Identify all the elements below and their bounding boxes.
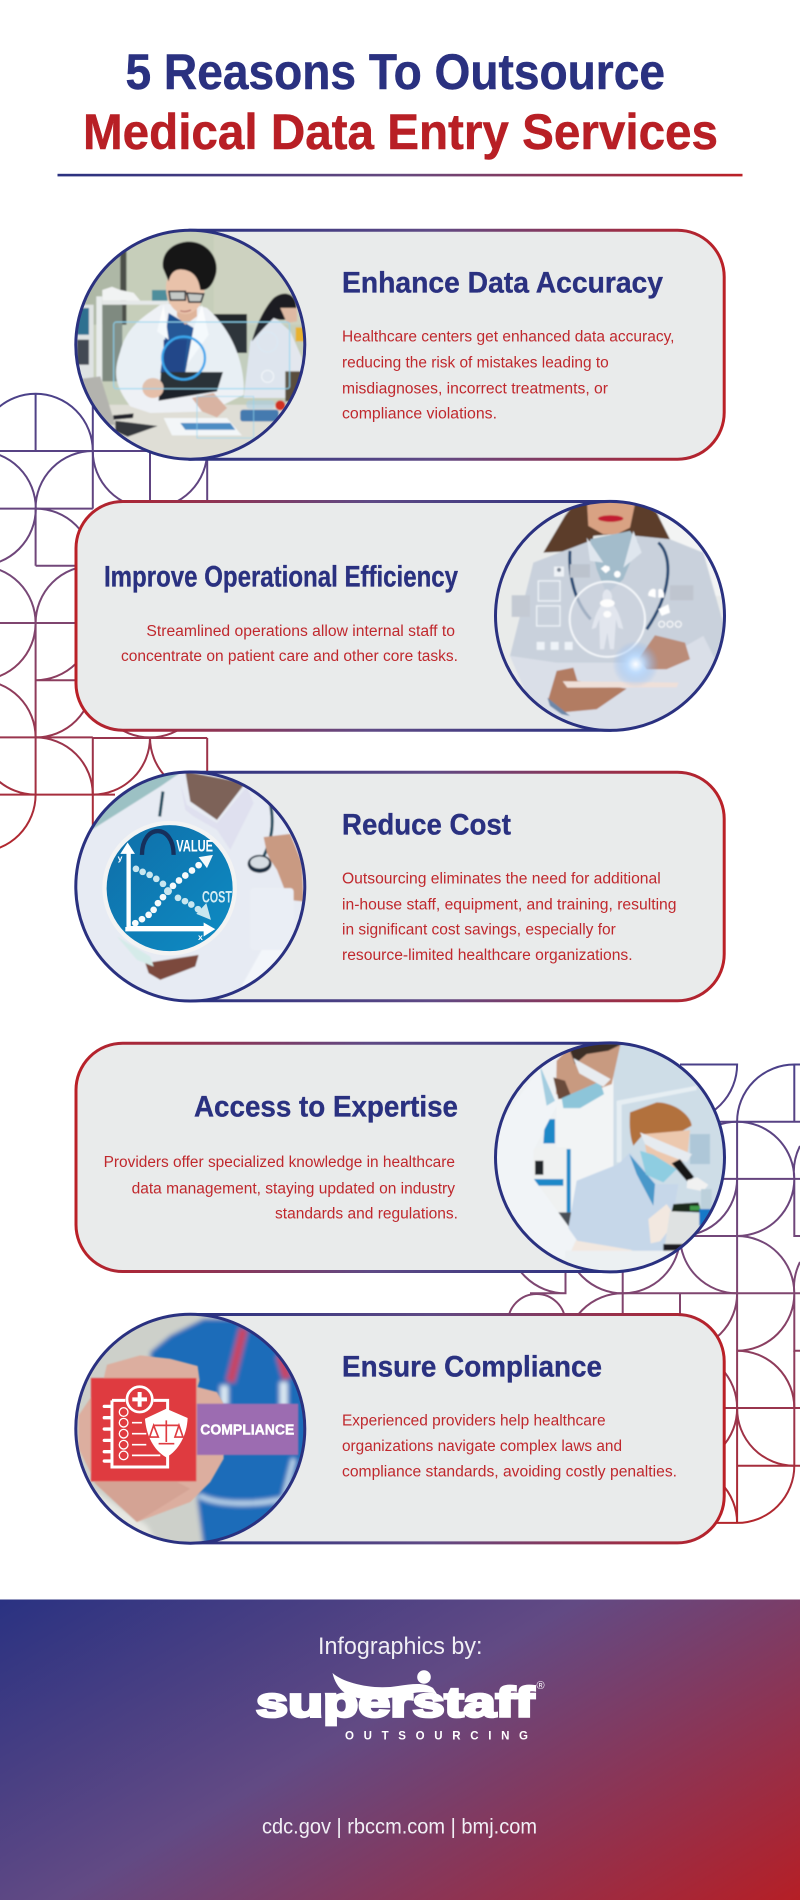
text block: resource-limited healthcare organizations.	[342, 947, 633, 964]
logo: superstaff outsourcing: ®	[536, 1680, 545, 1692]
text block: data management, staying updated on industry	[132, 1180, 455, 1197]
text block: in-house staff, equipment, and training, resulting	[342, 896, 676, 913]
text block: standards and regulations.	[275, 1205, 458, 1222]
logo: superstaff outsourcing	[256, 1670, 545, 1742]
photo: doctor with value and cost chart	[70, 766, 310, 1006]
title: Medical Data Entry Services	[83, 104, 718, 160]
title: 5 Reasons To Outsource	[126, 44, 665, 100]
photo: doctor with value and cost chart: y	[118, 853, 123, 863]
text block: compliance violations.	[342, 405, 497, 422]
photo: lab researchers with microscope	[490, 1037, 730, 1277]
panel: access to expertise	[76, 1043, 610, 1272]
heading: Access to Expertise	[194, 1091, 458, 1124]
sources: cdc.gov | rbccm.com | bmj.com	[262, 1816, 537, 1839]
logo: superstaff outsourcing: superstaff	[256, 1679, 535, 1726]
panel: reduce cost	[190, 772, 724, 1001]
text block: organizations navigate complex laws and	[342, 1438, 622, 1455]
text block: misdiagnoses, incorrect treatments, or	[342, 380, 608, 397]
photo: doctor with value and cost chart: COST	[202, 887, 232, 906]
logo: superstaff outsourcing: OUTSOURCING	[345, 1730, 528, 1742]
photo: doctor with value and cost chart: x	[198, 932, 203, 942]
text block: reducing the risk of mistakes leading to	[342, 355, 609, 372]
panel: improve operational efficiency	[76, 502, 610, 730]
title	[83, 44, 718, 160]
text block: concentrate on patient care and other core tasks.	[121, 648, 458, 665]
photo: doctor with value and cost chart: VALUE	[176, 836, 213, 855]
panel: enhance data accuracy	[190, 230, 724, 459]
heading: Improve Operational Efficiency	[104, 561, 458, 594]
decorative pattern: left	[0, 394, 207, 852]
photo: doctor with medical hologram	[490, 496, 730, 736]
text block: in significant cost savings, especially for	[342, 921, 616, 938]
text block: Providers offer specialized knowledge in healthcare	[104, 1154, 455, 1171]
text block: compliance standards, avoiding costly penalties.	[342, 1463, 677, 1480]
decorative pattern: right	[508, 1064, 800, 1523]
footer panel	[0, 1600, 800, 1900]
photo: hand holding compliance blocks: COMPLIANCE	[200, 1423, 295, 1439]
text block: Streamlined operations allow internal staff to	[146, 623, 455, 640]
heading: Reduce Cost	[342, 808, 511, 841]
panel: ensure compliance	[190, 1314, 724, 1543]
photo: doctor with tablet	[70, 225, 310, 465]
text block: Outsourcing eliminates the need for additional	[342, 870, 661, 887]
heading: Ensure Compliance	[342, 1350, 602, 1384]
text block	[342, 329, 674, 422]
text block	[121, 623, 458, 665]
heading: Enhance Data Accuracy	[342, 267, 664, 300]
text block	[104, 1154, 458, 1222]
text block: Experienced providers help healthcare	[342, 1412, 606, 1429]
text block	[342, 870, 676, 964]
text block: Healthcare centers get enhanced data accuracy,	[342, 329, 674, 346]
text block	[342, 1412, 677, 1480]
photo: hand holding compliance blocks	[70, 1309, 310, 1549]
credit line: Infographics by:	[318, 1633, 482, 1660]
